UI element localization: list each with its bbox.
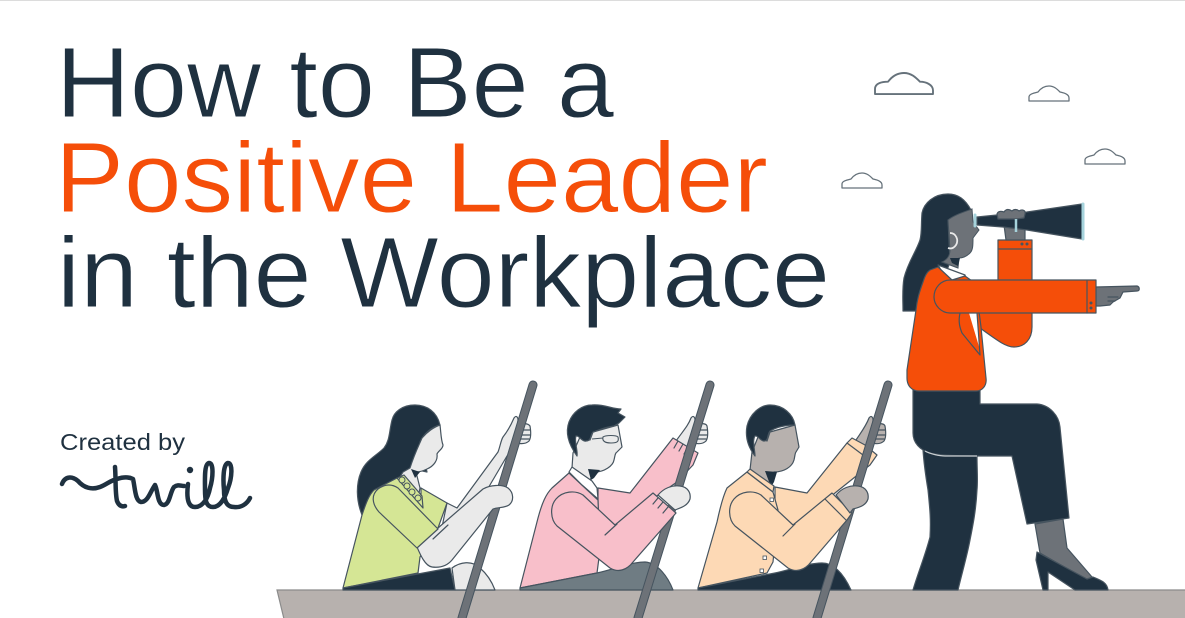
necklace xyxy=(397,475,423,508)
oar xyxy=(638,385,710,618)
knuckles on telescope xyxy=(997,210,1025,219)
far hand xyxy=(676,417,695,452)
rower 2: man in pink sweater xyxy=(520,385,710,618)
hair xyxy=(567,405,625,456)
near arm sleeve xyxy=(730,492,852,570)
trousers xyxy=(913,388,1069,524)
jacket xyxy=(907,267,986,391)
pointing hand xyxy=(1096,286,1139,306)
lower hand xyxy=(1004,225,1025,240)
neck and face xyxy=(750,425,799,486)
leader with telescope xyxy=(903,194,1139,590)
shirt collar xyxy=(938,265,968,285)
far sleeve xyxy=(598,438,698,525)
title xyxy=(55,27,830,329)
hair xyxy=(903,194,971,311)
neck and face xyxy=(942,209,979,268)
knee xyxy=(452,563,495,590)
telescope xyxy=(977,204,1082,239)
back leg xyxy=(913,450,977,590)
oar xyxy=(462,385,533,618)
created by twill logo xyxy=(60,429,250,507)
hair xyxy=(746,405,795,456)
far sleeve xyxy=(775,438,877,525)
near hand xyxy=(658,486,690,510)
title: Positive Leader xyxy=(55,122,768,234)
title: How to Be a xyxy=(56,27,614,139)
near hand xyxy=(836,486,868,513)
near arm sleeve xyxy=(552,492,676,570)
pink torso xyxy=(520,473,600,588)
lapel xyxy=(959,313,980,355)
collar xyxy=(569,467,598,499)
rower 3: man in peach shirt xyxy=(698,385,888,618)
front lower leg xyxy=(1035,519,1092,580)
neck and face xyxy=(572,425,622,480)
far fingers xyxy=(516,424,531,444)
grey pants xyxy=(520,562,673,590)
pants xyxy=(343,568,455,590)
green shirt xyxy=(343,478,447,588)
hair xyxy=(357,405,440,515)
far hand xyxy=(856,417,873,452)
peach torso xyxy=(698,472,778,588)
created by twill logo: Created by xyxy=(60,429,186,455)
dark pants xyxy=(698,563,851,590)
high heel shoe xyxy=(1036,552,1108,590)
rower 1: woman in green xyxy=(343,385,533,618)
shirt buttons xyxy=(760,498,774,572)
ear xyxy=(948,233,957,248)
boat xyxy=(277,590,1185,618)
far arm and hand xyxy=(442,417,518,527)
title: in the Workplace xyxy=(57,217,830,329)
green sleeve xyxy=(373,485,438,548)
near arm xyxy=(417,485,513,567)
oar xyxy=(817,385,888,618)
white shirt strip xyxy=(969,313,980,350)
neck and face xyxy=(398,425,443,498)
glasses xyxy=(592,436,618,443)
clouds xyxy=(842,73,1125,188)
collar xyxy=(747,469,774,492)
back upright arm xyxy=(975,240,1032,347)
front arm sleeve xyxy=(934,280,1096,313)
